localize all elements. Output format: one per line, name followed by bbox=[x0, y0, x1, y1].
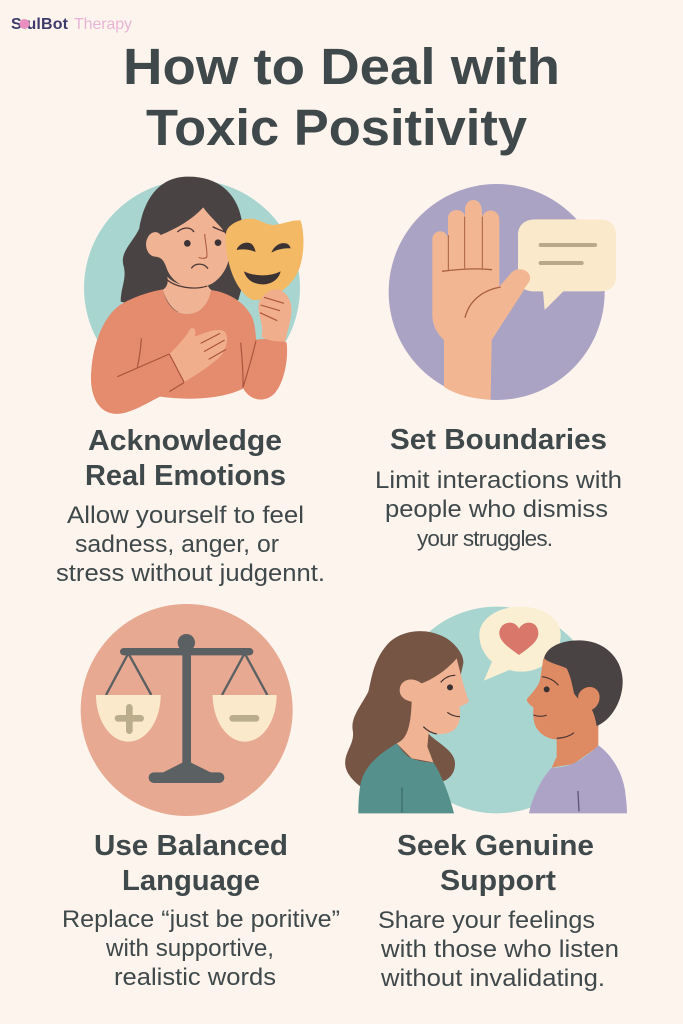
heading: Seek Genuine bbox=[397, 830, 594, 862]
icon: two people talking with heart bubble bbox=[345, 607, 627, 813]
title bbox=[123, 38, 560, 156]
text block: Replace “just be poritive” bbox=[62, 906, 340, 933]
title: Toxic Positivity bbox=[146, 99, 528, 156]
text block: Share your feelings bbox=[378, 907, 595, 934]
heading: Real Emotions bbox=[85, 460, 286, 492]
icon: balance scale bbox=[81, 604, 293, 816]
panel: acknowledge real emotions bbox=[56, 177, 325, 587]
text block: with supportive, bbox=[105, 935, 274, 962]
speech bubble with heart bbox=[479, 607, 561, 681]
speech bubble bbox=[518, 219, 616, 310]
text block: people who dismiss bbox=[385, 496, 608, 523]
panel: seek genuine support bbox=[345, 607, 627, 992]
title: How to Deal with bbox=[123, 38, 560, 95]
text block: stress without judgennt. bbox=[56, 560, 325, 587]
heading bbox=[397, 830, 594, 897]
heading: Support bbox=[440, 865, 556, 897]
panel: use balanced language bbox=[62, 604, 340, 991]
heading: Acknowledge bbox=[88, 425, 282, 457]
text block: without invalidating. bbox=[380, 965, 605, 992]
text block: Limit interactions with bbox=[375, 467, 622, 494]
text block bbox=[56, 502, 325, 587]
heading: Use Balanced bbox=[94, 830, 288, 862]
logo: SoulBot Therapy: Therapy bbox=[74, 16, 132, 33]
text block: your struggles. bbox=[417, 526, 553, 551]
man bbox=[527, 640, 627, 813]
panel: set boundaries bbox=[375, 184, 622, 551]
heading bbox=[94, 830, 288, 897]
text block: Allow yourself to feel bbox=[67, 502, 304, 529]
icon: woman holding smiling mask bbox=[84, 177, 303, 414]
text block: sadness, anger, or bbox=[75, 531, 279, 558]
icon: raised hand with speech bubble bbox=[389, 184, 616, 400]
text block: with those who listen bbox=[380, 936, 619, 963]
woman bbox=[345, 631, 469, 813]
text block: realistic words bbox=[114, 964, 276, 991]
logo: SoulBot Therapy: S ulBot bbox=[11, 16, 69, 33]
text block bbox=[378, 907, 619, 992]
heading: Language bbox=[122, 865, 260, 897]
mask bbox=[226, 219, 303, 300]
text block bbox=[62, 906, 340, 991]
text block bbox=[375, 467, 622, 551]
logo: SoulBot Therapy bbox=[11, 16, 132, 33]
heading bbox=[85, 425, 286, 492]
heading: Set Boundaries bbox=[390, 424, 607, 456]
